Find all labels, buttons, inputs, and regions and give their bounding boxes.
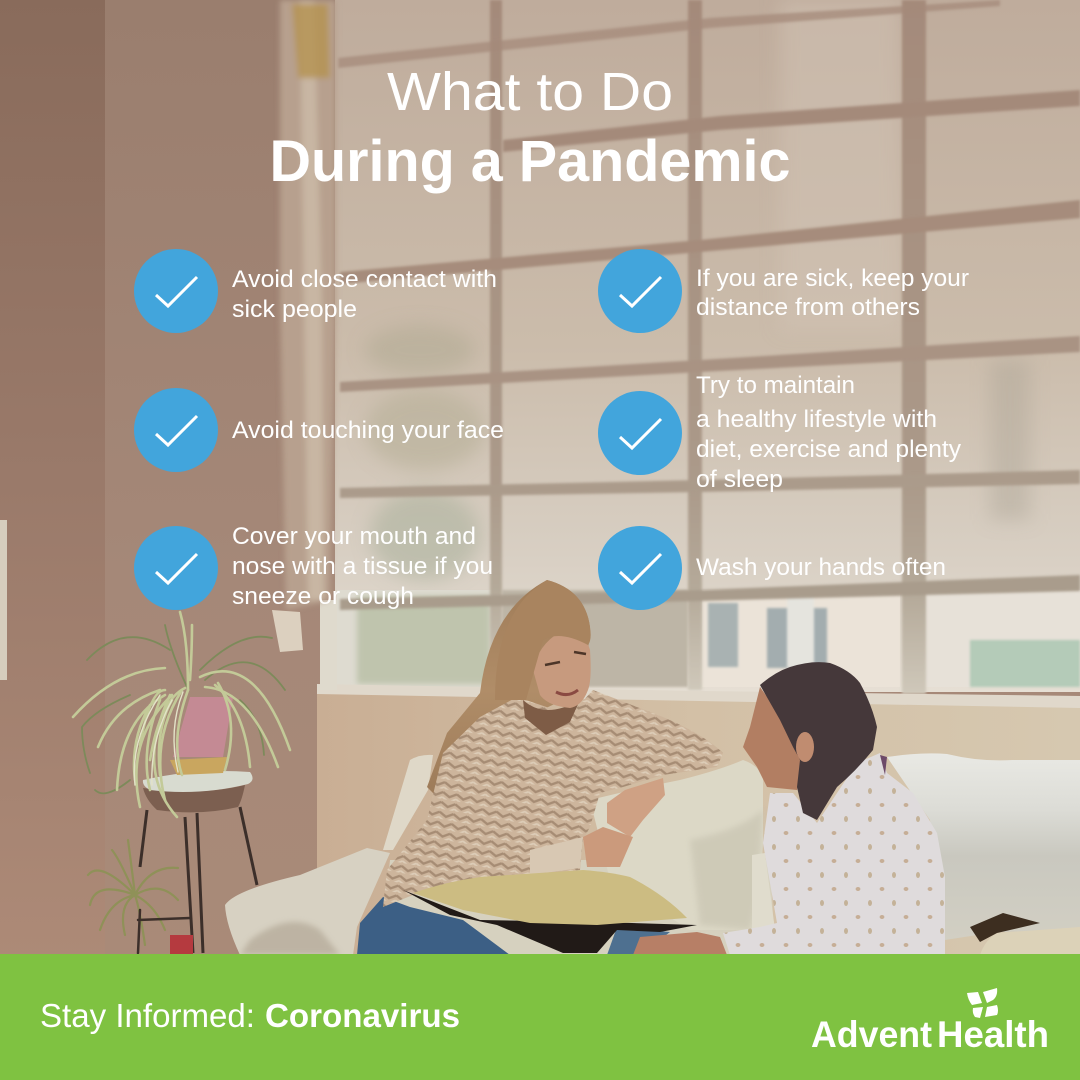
- spider plant on stool: [73, 612, 290, 953]
- item: avoid close contact: [134, 249, 497, 333]
- footer text: [40, 997, 460, 1034]
- item: wash hands: Wash your hands often: [696, 554, 946, 581]
- logo: AdventHealth: Health: [937, 1014, 1049, 1055]
- pillow fringe: [403, 890, 697, 953]
- item: keep distance: If you are sick, keep your: [696, 265, 969, 292]
- long hair back: [427, 580, 590, 800]
- item: wash hands: [598, 526, 946, 610]
- seat base under the figures: [380, 860, 775, 955]
- title: During a Pandemic: [270, 129, 790, 194]
- red object on floor: [170, 935, 193, 954]
- face: [533, 632, 591, 708]
- item: cover mouth and nose: Cover your mouth and: [232, 523, 476, 550]
- eyes and mouth: [545, 652, 586, 665]
- hair: [760, 662, 877, 820]
- item: healthy lifestyle: diet, exercise and plenty: [696, 436, 961, 463]
- jeans: [357, 897, 510, 955]
- face: [743, 687, 805, 790]
- logo: AdventHealth: [811, 988, 1049, 1055]
- item: cover mouth and nose: [134, 523, 493, 610]
- item: healthy lifestyle: a healthy lifestyle with: [696, 406, 937, 433]
- item: avoid touching face: Avoid touching your face: [232, 417, 504, 444]
- lower panes: [337, 590, 493, 687]
- cushion behind the woman's arm: [590, 760, 763, 930]
- logo: AdventHealth: Advent: [811, 1014, 932, 1055]
- small plant on floor: [88, 840, 190, 953]
- footer text: Stay Informed:: [40, 997, 255, 1034]
- sweater cuff: [530, 837, 583, 875]
- ear: [796, 732, 814, 762]
- woman right: [633, 662, 945, 955]
- item: avoid touching face: [134, 388, 504, 472]
- shirt: [723, 753, 945, 955]
- item: healthy lifestyle: [598, 372, 961, 493]
- item: cover mouth and nose: nose with a tissue if you: [232, 553, 493, 580]
- window panes: [335, 0, 1080, 692]
- footer text: Coronavirus: [265, 997, 460, 1034]
- lower wall under window: [317, 692, 1080, 960]
- neck: [523, 700, 580, 735]
- sofa: [225, 753, 1080, 955]
- sweater body: [383, 690, 723, 907]
- far-left window edge: [0, 520, 7, 680]
- item: avoid close contact: Avoid close contact with: [232, 266, 497, 293]
- pillow: [413, 870, 687, 925]
- item: keep distance: [598, 249, 969, 333]
- curtain: [280, 0, 336, 610]
- item: healthy lifestyle: of sleep: [696, 466, 783, 493]
- item: avoid close contact: sick people: [232, 296, 357, 323]
- footer bar: [0, 954, 1080, 1080]
- window frame: [490, 0, 926, 694]
- window sill: [317, 684, 1080, 708]
- hands: [607, 778, 665, 837]
- item: keep distance: distance from others: [696, 294, 920, 321]
- woman left: [357, 580, 723, 955]
- title: What to Do: [387, 62, 673, 122]
- title: [270, 62, 790, 194]
- item: healthy lifestyle: Try to maintain: [696, 372, 855, 399]
- item: cover mouth and nose: sneeze or cough: [232, 583, 414, 610]
- hand: [633, 932, 727, 955]
